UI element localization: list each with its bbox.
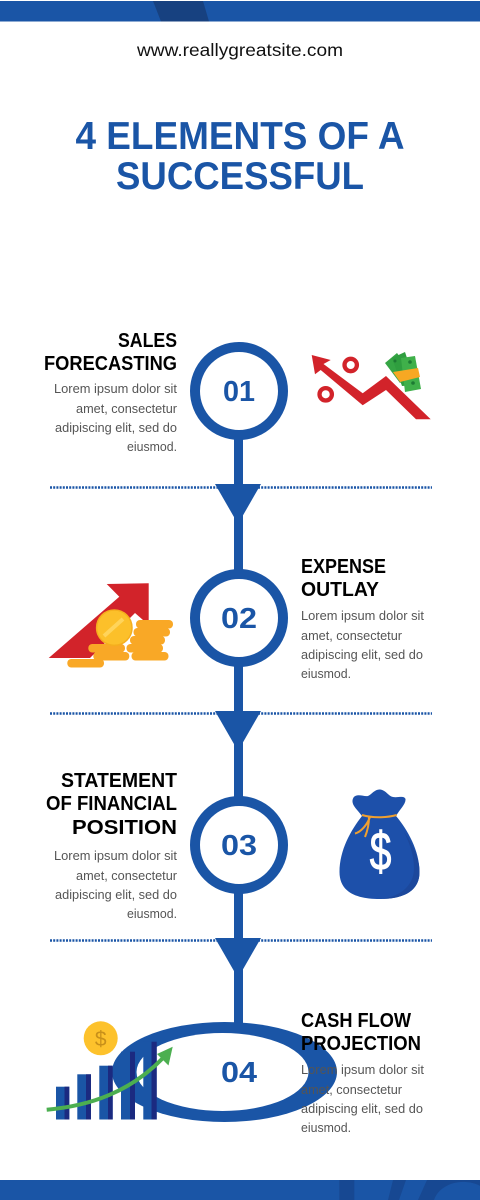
icon: money and falling arrow [312, 352, 431, 419]
step 4 text: CASH FLOW [301, 1010, 411, 1032]
step 2 text: eiusmod. [301, 666, 351, 681]
step 4 text: eiusmod. [301, 1120, 351, 1135]
step 1 text: Lorem ipsum dolor sit [54, 381, 177, 396]
step 3 text: Lorem ipsum dolor sit [54, 848, 177, 863]
top banner [0, 1, 480, 22]
step 1 text: amet, consectetur [76, 401, 178, 416]
step 4 text: PROJECTION [301, 1033, 421, 1055]
step 3 text [46, 770, 178, 921]
step 2 text: amet, consectetur [301, 628, 403, 643]
step 3 text: adipiscing elit, sed do [55, 887, 177, 902]
icon: bar chart with coin and green arrow: $ [95, 1028, 107, 1051]
title: SUCCESSFUL [116, 155, 364, 198]
step 2 marker [195, 574, 283, 662]
step 1 text: SALES [118, 330, 177, 352]
icon: money bag [340, 789, 420, 899]
step 1 text: eiusmod. [127, 439, 177, 454]
step 3 marker [195, 801, 283, 889]
step 3 text: POSITION [72, 817, 177, 839]
step 2 marker: 02 [221, 603, 257, 635]
step 2 text [301, 556, 424, 681]
step 2 text: EXPENSE [301, 556, 386, 578]
step 2 text: adipiscing elit, sed do [301, 647, 423, 662]
website url: www.reallygreatsite.com [136, 40, 343, 60]
dotted dividers [50, 488, 432, 940]
step 1 text: FORECASTING [44, 353, 177, 375]
step 4 text: amet, consectetur [301, 1082, 403, 1097]
step 1 marker: 01 [223, 376, 255, 408]
step 2 text: Lorem ipsum dolor sit [301, 608, 424, 623]
icon: money bag: $ [370, 821, 391, 881]
step 3 text: STATEMENT [61, 770, 177, 792]
step 4 text: Lorem ipsum dolor sit [301, 1062, 424, 1077]
step 3 text: eiusmod. [127, 906, 177, 921]
step 3 text: amet, consectetur [76, 868, 178, 883]
step 1 text [44, 330, 178, 454]
icon: bar chart with coin and green arrow [47, 1021, 173, 1120]
step 2 text: OUTLAY [301, 579, 380, 601]
bottom banner [0, 1180, 480, 1200]
step 3 marker: 03 [221, 830, 257, 862]
title [76, 115, 404, 198]
step 4 text [301, 1010, 424, 1135]
title: 4 ELEMENTS OF A [76, 115, 404, 158]
step 4 marker: 04 [221, 1057, 257, 1089]
icon: rising arrow and coins [49, 583, 173, 668]
step 1 marker [195, 347, 283, 435]
step 4 marker [112, 1022, 337, 1122]
step 1 text: adipiscing elit, sed do [55, 420, 177, 435]
step 4 text: adipiscing elit, sed do [301, 1101, 423, 1116]
step 3 text: OF FINANCIAL [46, 793, 177, 815]
timeline connector with arrows [215, 435, 261, 1030]
